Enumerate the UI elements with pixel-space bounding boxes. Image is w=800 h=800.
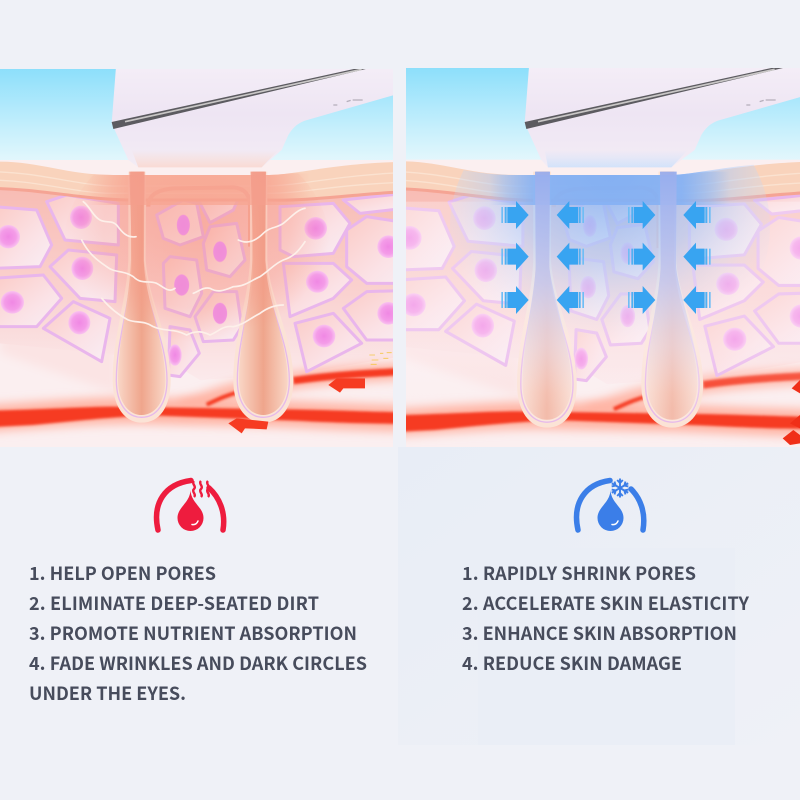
text block: cold benefits: 2. ACCELERATE SKIN ELASTICITY: [462, 590, 750, 616]
pale wash over cells: [400, 202, 800, 408]
text block: heat benefits: [29, 560, 367, 706]
heat glow: [74, 173, 318, 332]
text block: heat benefits: 4. FADE WRINKLES AND DARK CIRCLES: [29, 650, 367, 676]
device head: [112, 69, 393, 168]
text block: cold benefits: [462, 560, 750, 676]
blue hair shafts: [522, 172, 699, 422]
background tint behind cold list: [398, 447, 800, 745]
cold glow: [451, 164, 770, 318]
device head: [525, 60, 800, 167]
sky background: [406, 68, 800, 160]
text block: heat benefits: 3. PROMOTE NUTRIENT ABSORPTION: [29, 620, 357, 646]
text block: heat benefits: 1. HELP OPEN PORES: [29, 560, 216, 586]
skin cross-section: [0, 160, 393, 447]
red hair shafts: [129, 172, 275, 310]
panel: cold treatment illustration: [406, 68, 800, 447]
text block: cold benefits: 3. ENHANCE SKIN ABSORPTION: [462, 620, 737, 646]
icon: cold water drop gauge: [577, 478, 644, 531]
heat waves: [82, 202, 305, 335]
yellow sparkle dashes: [369, 353, 392, 364]
snowflake: [610, 478, 630, 498]
text block: cold benefits: 1. RAPIDLY SHRINK PORES: [462, 560, 696, 586]
text block: heat benefits: 2. ELIMINATE DEEP-SEATED DIRT: [29, 590, 319, 616]
text block: cold benefits: 4. REDUCE SKIN DAMAGE: [462, 650, 682, 676]
red vessel arrows: [783, 380, 800, 445]
central cell nuclei: [174, 215, 227, 324]
text block: heat benefits: UNDER THE EYES.: [29, 680, 186, 706]
panel: heat treatment illustration: [0, 69, 393, 447]
cooling arrows: [501, 201, 711, 314]
sky background: [0, 69, 393, 160]
icon: hot water drop gauge: [157, 480, 224, 531]
skin cross-section: [406, 160, 800, 447]
red vessel arrows: [228, 378, 365, 433]
